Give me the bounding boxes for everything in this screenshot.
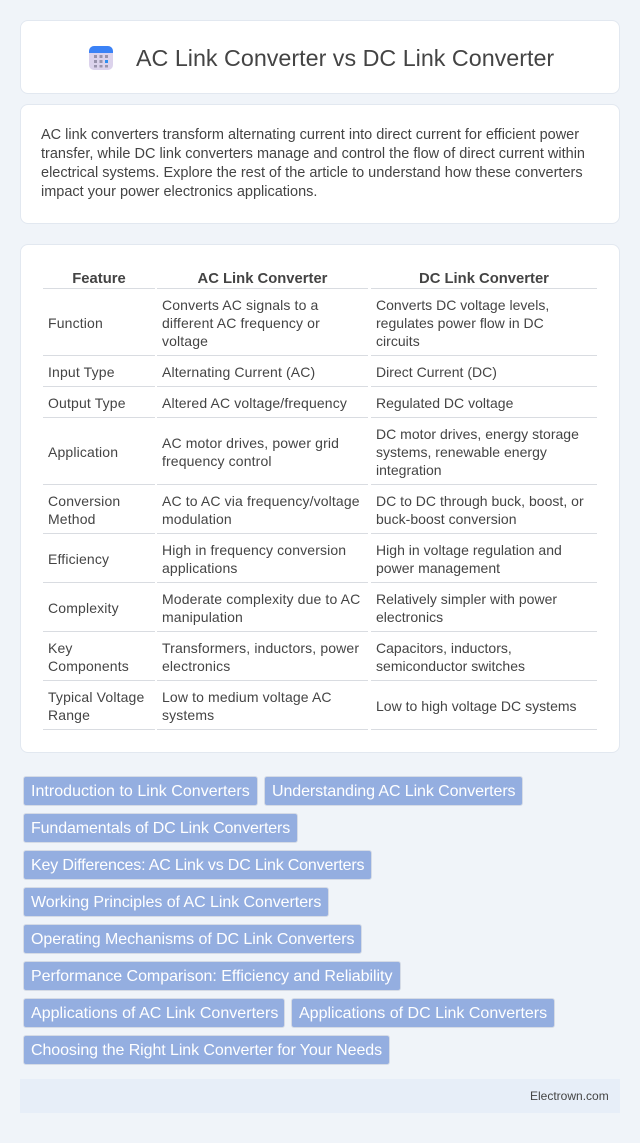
row: Efficiency: applications [162, 560, 238, 576]
row: Typical Voltage Range [48, 689, 577, 723]
tag: Key Differences: AC Link vs DC Link Converters [31, 857, 364, 874]
row: Efficiency: power management [376, 560, 500, 576]
tag [23, 813, 298, 843]
tag [23, 776, 258, 806]
tag [264, 776, 523, 806]
tag [291, 998, 555, 1028]
row: Output Type [48, 395, 513, 411]
row: Conversion Method: Conversion [48, 493, 120, 509]
tag [23, 924, 362, 954]
row: Output Type: Output Type [48, 395, 126, 411]
comparison table panel [20, 244, 620, 753]
row: Key Components: electronics [162, 658, 230, 674]
row: Complexity: Moderate complexity due to AC [162, 591, 360, 607]
row: Complexity: Relatively simpler with power [376, 591, 557, 607]
intro text: transfer, while DC link converters manage and control the flow of direct current within [41, 146, 585, 162]
row: Complexity [48, 591, 557, 625]
row: Conversion Method: Method [48, 511, 96, 527]
row: Typical Voltage Range: systems [162, 707, 214, 723]
row: Function: voltage [162, 333, 208, 349]
row: Efficiency: High in frequency conversion [162, 542, 346, 558]
footer text: Electrown.com [530, 1089, 609, 1103]
intro text: AC link converters transform alternating current into direct current for efficient power [41, 127, 579, 143]
row: Key Components: Capacitors, inductors, [376, 640, 512, 656]
row: Function: regulates power flow in DC [376, 315, 544, 331]
intro panel [20, 104, 620, 224]
tags: section links [23, 776, 555, 1065]
row: Key Components [48, 640, 525, 674]
footer bar [20, 1079, 620, 1113]
row: Conversion Method [48, 493, 584, 527]
row: Function [48, 297, 549, 349]
tag: Applications of DC Link Converters [299, 1005, 547, 1022]
row: Key Components: semiconductor switches [376, 658, 525, 674]
row: Typical Voltage Range: Range [48, 707, 90, 723]
tag: Applications of AC Link Converters [31, 1005, 278, 1022]
row: Key Components: Transformers, inductors, power [162, 640, 359, 656]
intro text [41, 127, 585, 200]
row: Function: Converts DC voltage levels, [376, 297, 549, 313]
row: Input Type [48, 364, 497, 380]
tag [23, 887, 329, 917]
row: Function: circuits [376, 333, 420, 349]
row: Input Type: Alternating Current (AC) [162, 364, 315, 380]
row: Conversion Method: buck-boost conversion [376, 511, 516, 527]
row: Application: systems, renewable energy [376, 444, 547, 460]
row: Typical Voltage Range: Low to medium voltage AC [162, 689, 332, 705]
row: Function: Converts AC signals to a [162, 297, 318, 313]
row: Key Components: Key [48, 640, 73, 656]
icon: calendar app [89, 46, 113, 70]
row: Conversion Method: DC to DC through buck, boost, or [376, 493, 584, 509]
tag: Performance Comparison: Efficiency and Reliability [31, 968, 392, 985]
row: Application: DC motor drives, energy storage [376, 426, 579, 442]
row: Input Type: Direct Current (DC) [376, 364, 497, 380]
row: Key Components: Components [48, 658, 129, 674]
row: Application: integration [376, 462, 442, 478]
comparison table [43, 271, 597, 730]
tag: Choosing the Right Link Converter for Your Needs [31, 1042, 382, 1059]
row: Typical Voltage Range: Typical Voltage [48, 689, 144, 705]
row: Application: Application [48, 444, 118, 460]
tag: Working Principles of AC Link Converters [31, 894, 321, 911]
row: Complexity: electronics [376, 609, 443, 625]
row: Efficiency [48, 542, 562, 576]
tag [23, 961, 401, 991]
row: Output Type: Regulated DC voltage [376, 395, 513, 411]
row: Typical Voltage Range: Low to high voltage DC systems [376, 698, 577, 714]
header panel [20, 20, 620, 94]
row: Conversion Method: modulation [162, 511, 232, 527]
tag [23, 1035, 390, 1065]
table header: DC Link Converter: DC Link Converter [419, 271, 549, 287]
tag: Fundamentals of DC Link Converters [31, 820, 290, 837]
tag [23, 998, 285, 1028]
row: Efficiency: Efficiency [48, 551, 109, 567]
row: Complexity: manipulation [162, 609, 243, 625]
row: Application: AC motor drives, power grid [162, 435, 339, 451]
title: AC Link Converter vs DC Link Converter [136, 45, 554, 71]
row: Application: frequency control [162, 453, 272, 469]
row: Efficiency: High in voltage regulation and [376, 542, 562, 558]
row: Function: Function [48, 315, 103, 331]
tag: Introduction to Link Converters [31, 783, 250, 800]
row: Function: different AC frequency or [162, 315, 320, 331]
table header: Feature: Feature [72, 271, 126, 287]
row: Output Type: Altered AC voltage/frequency [162, 395, 347, 411]
row: Input Type: Input Type [48, 364, 115, 380]
row: Complexity: Complexity [48, 600, 119, 616]
tag [23, 850, 372, 880]
intro text: electrical systems. Explore the rest of the article to understand how these converters [41, 165, 583, 181]
row: Conversion Method: AC to AC via frequency/voltage [162, 493, 360, 509]
tag: Understanding AC Link Converters [272, 783, 515, 800]
table header: AC Link Converter: AC Link Converter [198, 271, 327, 287]
row: Application [48, 426, 579, 478]
intro text: impact your power electronics applications. [41, 184, 317, 200]
tag: Operating Mechanisms of DC Link Converters [31, 931, 354, 948]
